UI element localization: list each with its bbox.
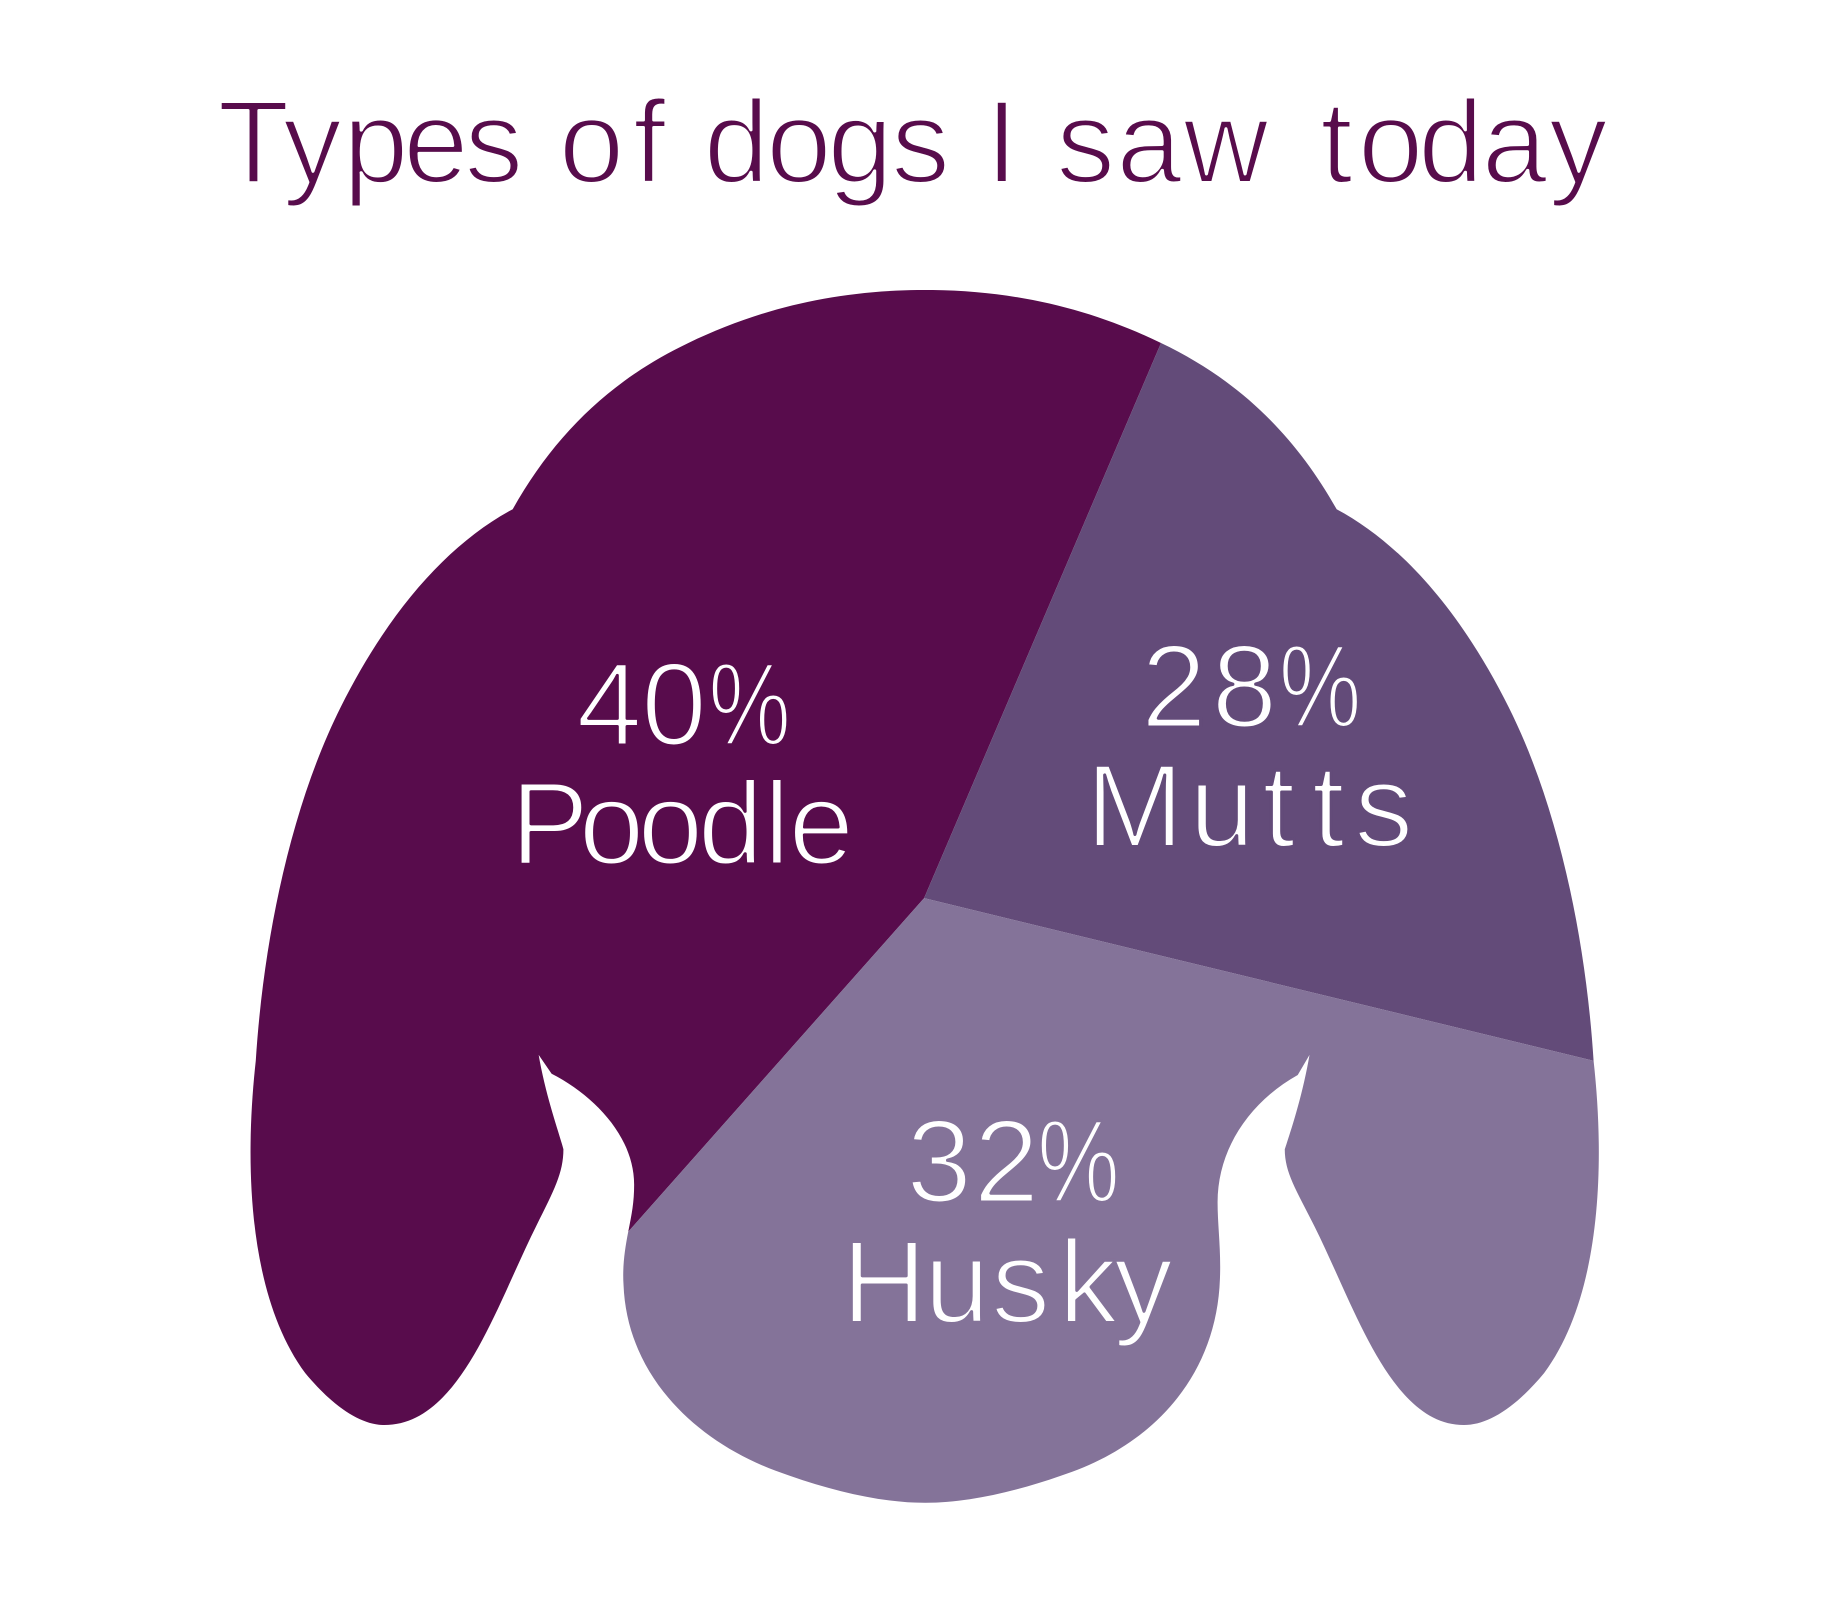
name: Mutts: Mutts [1086, 739, 1413, 871]
title: Types of dogs I saw today [217, 76, 1608, 208]
value: 32% [906, 1095, 1120, 1227]
value: 32%: % [1037, 1095, 1120, 1227]
value: 28%: % [1279, 620, 1361, 752]
label: Poodle [510, 638, 854, 889]
value: 40%: % [708, 638, 791, 770]
name: Poodle: Poodle [510, 757, 854, 889]
value: 40% [576, 638, 791, 770]
name: Husky: Husky [842, 1215, 1173, 1347]
slice: Mutts 28% [924, 343, 1594, 1061]
label: Husky [842, 1095, 1173, 1347]
infographic canvas [222, 98, 1606, 1503]
value: 28%: 28 [1141, 620, 1277, 752]
label: Mutts [1086, 620, 1413, 871]
value: 40%: 40 [576, 638, 707, 770]
pie chart: dog face shape [250, 290, 1599, 1503]
value: 32%: 32 [906, 1095, 1039, 1227]
slice: Husky 32% [623, 898, 1599, 1503]
slice: Poodle 40% [250, 290, 1161, 1425]
value: 28% [1141, 620, 1361, 752]
